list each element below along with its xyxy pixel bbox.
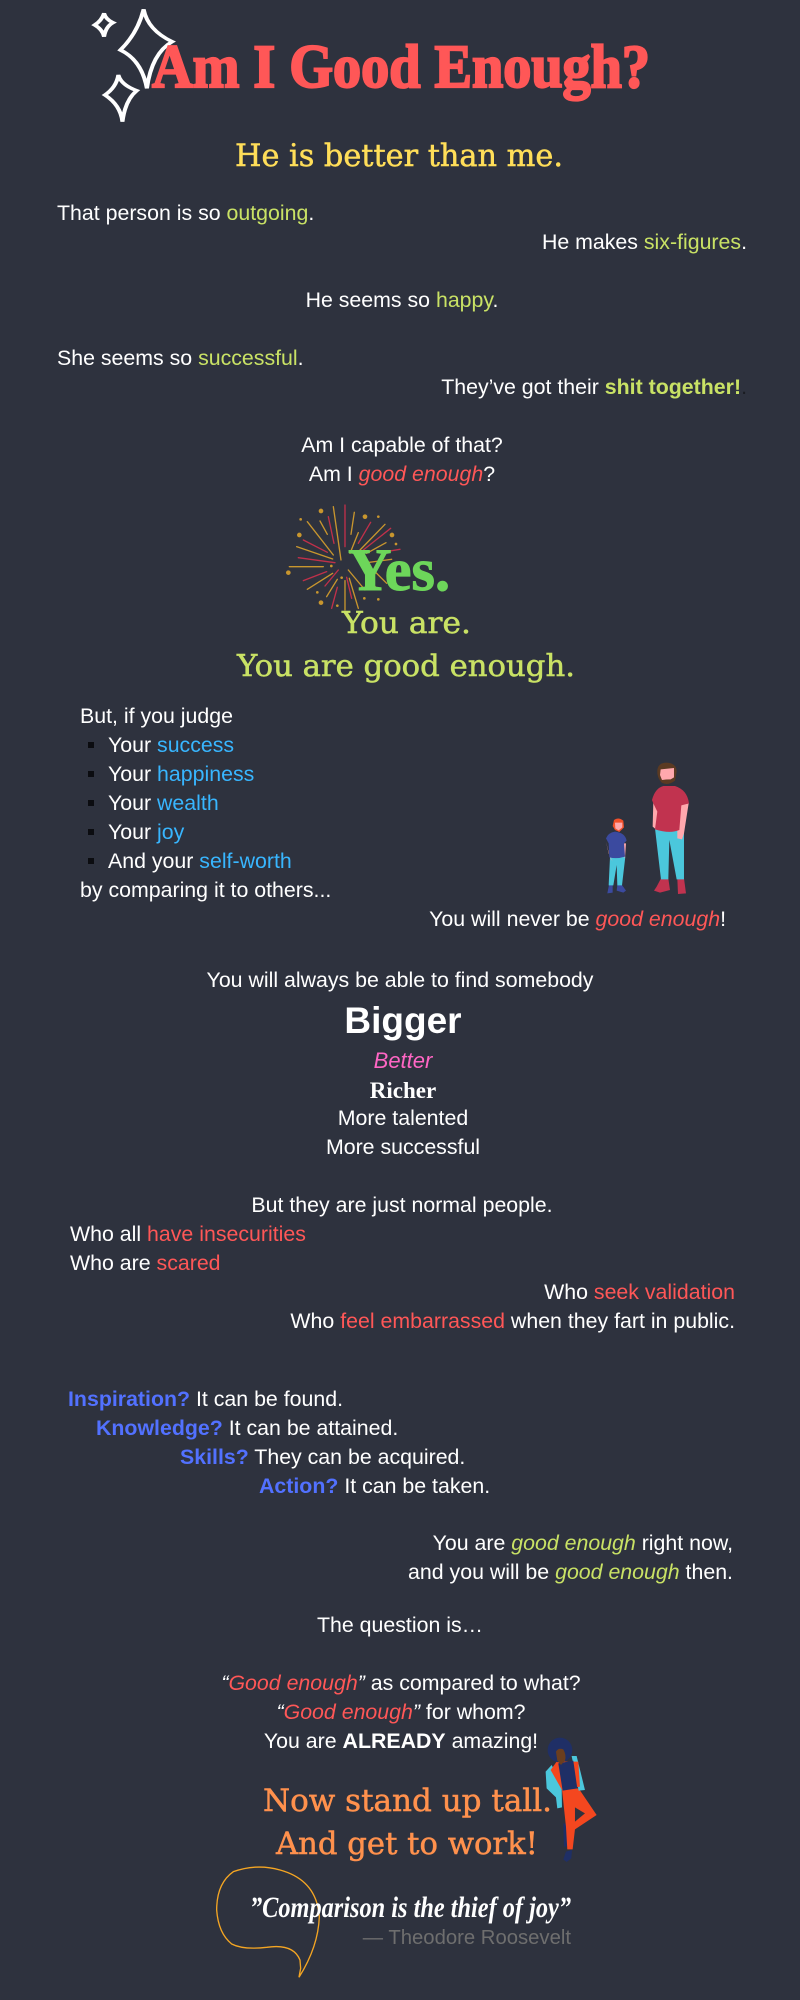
heading: now stand up tall: Now stand up tall. [263, 1783, 552, 1819]
icon: speech bubble [217, 1867, 319, 1977]
text block: comparisons [57, 201, 747, 486]
text block: normal people [70, 1193, 735, 1333]
list: things you judge [80, 704, 331, 902]
text block: comparisons: They’ve got their shit together!. [441, 375, 747, 399]
text block: bigger better richer: Better [374, 1048, 434, 1073]
list: things you judge: And your self-worth [108, 849, 292, 873]
list: things you judge: Your success [108, 733, 234, 757]
text block: normal people: Who are scared [70, 1251, 221, 1275]
icon: sparkles [95, 9, 172, 122]
text block: bigger better richer: Richer [370, 1078, 436, 1103]
text block: comparisons: He seems so happy. [306, 288, 498, 312]
text block: normal people: Who seek validation [544, 1280, 735, 1304]
text block: inspiration knowledge skills action [68, 1387, 490, 1498]
text block: right now: and you will be good enough then. [408, 1560, 733, 1584]
text block: comparisons: Am I capable of that? [301, 433, 503, 457]
text block: normal people: Who feel embarrassed when they fart in public. [290, 1309, 735, 1333]
text block: comparisons: He makes six-figures. [542, 230, 747, 254]
list: things you judge: Your wealth [108, 791, 219, 815]
list: things you judge: But, if you judge [80, 704, 233, 728]
list: things you judge: by comparing it to others... [80, 878, 331, 902]
text block: bigger better richer: More talented [338, 1106, 468, 1130]
text block: the question: “Good enough” as compared to what? [221, 1671, 581, 1695]
text block: right now: You are good enough right now, [433, 1531, 733, 1555]
quote: ”Comparison is the thief of joy” [250, 1891, 571, 1924]
text block: bigger better richer: More successful [326, 1135, 480, 1159]
heading: yes: Yes. [348, 537, 450, 603]
text block: the question: “Good enough” for whom? [276, 1700, 526, 1724]
text block: bigger better richer [207, 968, 594, 1159]
attribution: — Theodore Roosevelt [363, 1927, 571, 1949]
text block: normal people: But they are just normal people. [251, 1193, 553, 1217]
text block: bigger better richer: You will always be able to find somebody [207, 968, 594, 992]
small man [606, 818, 627, 893]
heading: you are good enough: You are good enough. [236, 649, 575, 684]
text block: comparisons: Am I good enough? [309, 462, 495, 486]
text block: the question [221, 1613, 581, 1753]
illustration: woman leaning [546, 1738, 597, 1862]
list: things you judge: Your joy [108, 820, 185, 844]
text block: bigger better richer: Bigger [344, 1000, 462, 1041]
text block: inspiration knowledge skills action: Knowledge? It can be attained. [96, 1416, 398, 1440]
text block: comparisons: That person is so outgoing. [57, 201, 314, 225]
icon: fireworks [286, 505, 400, 610]
text block: inspiration knowledge skills action: Inspiration? It can be found. [68, 1387, 343, 1411]
list: things you judge: Your happiness [108, 762, 254, 786]
illustration: small man and tall man [606, 763, 689, 894]
heading: he is better: He is better than me. [235, 138, 563, 174]
text block: the question: The question is… [317, 1613, 483, 1637]
heading: and get to work: And get to work! [275, 1826, 538, 1862]
title: Am I Good Enough? [152, 34, 650, 101]
heading: you are: You are. [341, 606, 471, 641]
text block: comparisons: She seems so successful. [57, 346, 304, 370]
text block: normal people: Who all have insecurities [70, 1222, 306, 1246]
text block: the question: You are ALREADY amazing! [264, 1729, 538, 1753]
text block: inspiration knowledge skills action: Action? It can be taken. [259, 1474, 490, 1498]
text block: right now [408, 1531, 733, 1584]
text: you will never be good enough: You will never be good enough! [429, 907, 726, 931]
tall man [652, 763, 689, 894]
text block: inspiration knowledge skills action: Skills? They can be acquired. [180, 1445, 465, 1469]
